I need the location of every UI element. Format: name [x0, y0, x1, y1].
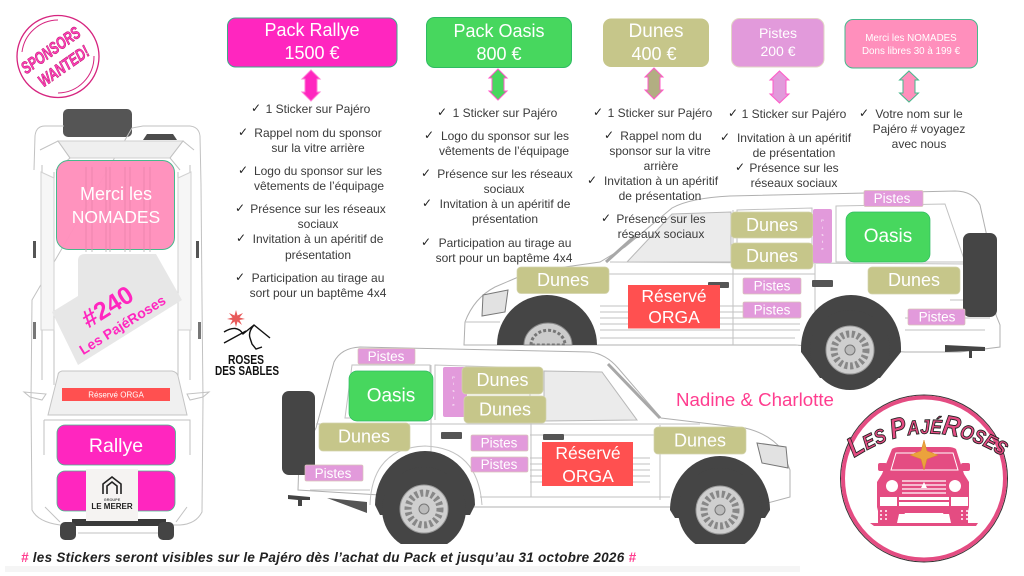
sticker: oasis: Oasis — [864, 226, 912, 247]
benefits list: merci les nomades: Votre nom sur le — [875, 107, 963, 121]
windshield — [48, 371, 187, 415]
sticker: pistes roof: Pistes — [368, 349, 405, 364]
sticker: oasis — [846, 212, 930, 262]
benefits list: rallye: ✓ — [235, 270, 245, 284]
door handles — [708, 282, 729, 288]
benefits list: pistes: Présence sur les — [749, 161, 839, 175]
sticker: piste vertical: e — [821, 246, 824, 251]
benefits list: rallye: sur la vitre arrière — [271, 141, 365, 155]
sticker: pistes rear: Pistes — [315, 466, 352, 481]
stamp: sponsors wanted: SPONSORS — [18, 23, 85, 78]
logo: roses des sables: ROSES — [228, 352, 264, 367]
sticker: piste vertical: s — [452, 388, 454, 393]
benefits list: oasis: ✓ — [421, 235, 431, 249]
benefits list: rallye: vêtements de l’équipage — [254, 179, 384, 193]
logo car — [870, 447, 978, 526]
sticker: pistes roof: Pistes — [874, 191, 911, 206]
benefits list: rallye: sort pour un baptême 4x4 — [250, 286, 387, 300]
sticker: rallye — [57, 425, 176, 465]
logo: groupe le merer: LE MERER — [91, 502, 133, 511]
pack header: pistes — [732, 18, 824, 67]
benefits list: oasis: sort pour un baptême 4x4 — [436, 251, 573, 265]
pack header: oasis: 800 € — [476, 44, 522, 64]
sticker: réservé orga: ORGA — [562, 466, 614, 486]
benefits list: merci les nomades — [859, 106, 965, 151]
sticker: dunes window 1 — [462, 367, 543, 394]
benefits list: dunes: ✓ — [587, 173, 597, 187]
door handles — [441, 432, 462, 439]
rear wheel — [375, 451, 475, 551]
benefits list: rallye: ✓ — [238, 125, 248, 139]
body lines — [310, 365, 700, 505]
pack header: dunes: Dunes — [629, 21, 683, 42]
benefits list: dunes: réseaux sociaux — [618, 227, 704, 241]
sticker: pistes door 1: Pistes — [481, 436, 518, 450]
benefits list: rallye: ✓ — [235, 201, 245, 215]
sticker: piste vertical: e — [452, 402, 455, 407]
sticker: dunes rear: Dunes — [338, 426, 390, 446]
sticker: réservé orga: Réservé ORGA — [88, 390, 144, 400]
benefits list: oasis — [421, 105, 573, 265]
arrow: oasis — [489, 69, 507, 100]
spare wheel — [282, 391, 315, 475]
crew names: Nadine & Charlotte — [676, 389, 834, 410]
pack header: merci les nomades: Merci les NOMADES — [865, 33, 957, 44]
sticker: dunes front — [517, 267, 609, 294]
pack header: oasis — [426, 18, 572, 68]
tyres — [60, 522, 76, 540]
sticker: rallye: Rallye — [89, 435, 143, 457]
sticker: pistes roof — [864, 190, 923, 206]
sticker: merci les nomades: NOMADES — [72, 207, 160, 227]
benefits list: rallye: ✓ — [236, 231, 246, 245]
pack header: pistes: 200 € — [760, 43, 796, 59]
sticker: pistes door 1: Pistes — [754, 278, 791, 294]
benefits list: rallye: Logo du sponsor sur les — [254, 164, 382, 178]
body lines — [465, 210, 995, 345]
benefits list: dunes: ✓ — [593, 105, 603, 119]
sticker: oasis — [349, 371, 433, 421]
sticker: piste vertical: i — [822, 225, 823, 230]
sticker: piste vertical: P — [821, 218, 824, 223]
benefits list: dunes: ✓ — [601, 211, 611, 225]
benefits list: pistes: 1 Sticker sur Pajéro — [742, 107, 847, 121]
benefits list: merci les nomades: ✓ — [859, 106, 869, 120]
benefits list: rallye — [235, 101, 387, 300]
spare wheel — [963, 233, 997, 317]
sticker: piste vertical: P — [452, 375, 455, 380]
benefits list: merci les nomades: Pajéro # voyagez — [873, 122, 965, 136]
benefits list: rallye: ✓ — [238, 163, 248, 177]
footer note: # les Stickers seront visibles sur le Pajéro dès l’achat du Pack et jusqu’au 31 octobre 2026 # — [21, 550, 636, 565]
headlight — [757, 443, 788, 468]
sticker: dunes window 2 — [464, 396, 546, 423]
sticker: pistes rear — [305, 465, 363, 481]
tow hitch — [288, 495, 310, 506]
sticker: pistes door 2 — [471, 457, 528, 472]
benefits list: oasis: Participation au tirage au — [439, 236, 571, 250]
side vehicle, lower — [282, 347, 790, 552]
sticker: dunes window 1: Dunes — [746, 215, 798, 235]
sticker: pistes door 1 — [743, 278, 801, 294]
sticker: réservé orga — [62, 388, 170, 401]
sticker: piste vertical: t — [822, 239, 824, 244]
logo: roses des sables — [215, 310, 279, 378]
spare wheel on roof — [63, 109, 132, 137]
sticker: réservé orga — [542, 442, 633, 486]
side vehicle, upper right — [464, 191, 1000, 390]
benefits list: oasis: ✓ — [421, 166, 431, 180]
sticker: pistes door 2: Pistes — [481, 457, 518, 472]
headlight — [482, 290, 508, 316]
windows — [627, 212, 731, 262]
body outline — [298, 347, 790, 507]
stickers on upper vehicle — [517, 190, 965, 328]
roof box — [143, 134, 177, 140]
logo: roses des sables: DES SABLES — [215, 363, 279, 378]
logo: les pajéroses: LES PAJÉROSES — [846, 415, 1008, 458]
pack header: oasis: Pack Oasis — [453, 21, 545, 41]
pack header: merci les nomades: Dons libres 30 à 199 € — [862, 46, 961, 57]
sticker: dunes window 2: Dunes — [479, 400, 531, 420]
sticker: pistes door 1 — [471, 435, 528, 451]
sticker: réservé orga: Réservé — [641, 286, 707, 306]
sticker: dunes window 1 — [731, 212, 813, 238]
arrow: rallye — [302, 70, 320, 101]
sticker: réservé orga — [628, 285, 720, 328]
benefits list: oasis: Logo du sponsor sur les — [441, 129, 569, 143]
benefits list: oasis: vêtements de l’équipage — [439, 144, 569, 158]
sticker: race number — [52, 254, 182, 365]
sticker: rallye bumper — [57, 471, 175, 511]
sticker: dunes front: Dunes — [537, 270, 589, 290]
pack header: pistes: Pistes — [759, 25, 797, 41]
pack header: rallye: Pack Rallye — [264, 20, 360, 40]
logo title — [854, 433, 1002, 458]
benefits list: rallye: Participation au tirage au — [252, 271, 384, 285]
benefits list: rallye: présentation — [285, 248, 351, 262]
sticker: dunes window 2: Dunes — [746, 246, 798, 266]
logo: groupe le merer: GROUPE — [104, 498, 121, 502]
benefits list: dunes: sponsor sur la vitre — [609, 144, 711, 158]
white cutout below upper vehicle — [450, 346, 812, 392]
benefits list: dunes: de présentation — [619, 189, 701, 203]
benefits list: oasis: Présence sur les réseaux — [437, 167, 573, 181]
sticker: pistes door 2: Pistes — [754, 302, 791, 318]
windows — [544, 371, 637, 421]
sticker: dunes front — [654, 427, 746, 454]
sticker: dunes rear — [319, 423, 410, 451]
body outline — [464, 191, 1000, 352]
sticker: race number: #240 — [77, 281, 139, 334]
benefits list: oasis: sociaux — [484, 182, 524, 196]
sticker: dunes rear — [868, 267, 960, 294]
benefits list: pistes: de présentation — [753, 146, 835, 160]
benefits list: dunes: Présence sur les — [616, 212, 706, 226]
arrow: dunes — [645, 68, 663, 99]
sticker: pistes rear: Pistes — [919, 310, 956, 324]
sticker: race number: Les PajéRoses — [76, 292, 169, 358]
benefits list: pistes: ✓ — [720, 130, 730, 144]
benefits list: pistes: réseaux sociaux — [751, 176, 837, 190]
arrow: merci les nomades — [900, 71, 918, 102]
benefits list: dunes — [587, 105, 719, 241]
sticker: piste vertical: t — [453, 395, 455, 400]
benefits list: oasis: 1 Sticker sur Pajéro — [453, 106, 558, 120]
front wheel — [497, 295, 597, 345]
stickers on lower vehicle — [305, 348, 746, 486]
sticker: pistes roof — [358, 348, 415, 364]
vehicle top-view with stickers — [24, 109, 209, 540]
stamp: sponsors wanted: WANTED! — [35, 42, 93, 91]
sticker: pistes rear — [908, 309, 965, 325]
sticker: piste vertical — [813, 209, 832, 263]
benefits list: oasis: ✓ — [422, 196, 432, 210]
benefits list: rallye: 1 Sticker sur Pajéro — [266, 102, 371, 116]
logo star — [910, 440, 938, 470]
logo: groupe le merer — [86, 469, 138, 521]
benefits list: rallye: Invitation à un apéritif de — [253, 232, 384, 246]
benefits list: pistes: Invitation à un apéritif — [737, 131, 852, 145]
sticker: dunes window 1: Dunes — [476, 370, 529, 390]
benefits list: oasis: présentation — [472, 212, 538, 226]
sticker: réservé orga: ORGA — [648, 307, 700, 327]
benefits list: dunes: Invitation à un apéritif — [604, 174, 719, 188]
benefits list: oasis: ✓ — [424, 128, 434, 142]
pack header: rallye: 1500 € — [284, 43, 340, 63]
sticker: oasis: Oasis — [367, 386, 415, 406]
benefits list: dunes: arrière — [644, 159, 679, 173]
benefits list: rallye: sociaux — [298, 217, 338, 231]
benefits list: rallye: Rappel nom du sponsor — [254, 126, 382, 140]
sticker: merci les nomades: Merci les — [80, 184, 152, 204]
sticker: dunes window 2 — [731, 243, 813, 269]
sticker: piste vertical: i — [453, 381, 454, 386]
pack header: dunes — [603, 18, 709, 67]
stamp: sponsors wanted — [17, 16, 99, 98]
pack header: merci les nomades — [845, 20, 978, 68]
sticker: merci les nomades — [56, 160, 174, 250]
front wheel — [670, 456, 770, 552]
benefits list: dunes: 1 Sticker sur Pajéro — [608, 106, 713, 120]
sticker: piste vertical — [443, 367, 467, 417]
vehicle outline — [24, 126, 209, 540]
benefits list: dunes: Rappel nom du — [620, 129, 702, 143]
benefits list: oasis: ✓ — [437, 105, 447, 119]
tow hitch — [945, 345, 985, 358]
benefits list: pistes: ✓ — [728, 106, 738, 120]
benefits list: pistes: ✓ — [735, 160, 745, 174]
sticker: dunes rear: Dunes — [888, 270, 940, 290]
benefits list: rallye: Présence sur les réseaux — [250, 202, 386, 216]
sticker: réservé orga: Réservé — [555, 443, 621, 463]
benefits list: merci les nomades: avec nous — [892, 137, 946, 151]
sticker: pistes door 2 — [743, 302, 801, 318]
footer note — [5, 550, 800, 572]
benefits list: oasis: Invitation à un apéritif de — [440, 197, 571, 211]
pack header: rallye — [228, 18, 397, 67]
benefits list: dunes: ✓ — [604, 128, 614, 142]
sticker: piste vertical: s — [822, 232, 824, 237]
logo: les pajéroses — [840, 394, 1008, 562]
pack header: dunes: 400 € — [631, 44, 677, 64]
arrow: pistes — [770, 71, 789, 103]
benefits list: rallye: ✓ — [251, 101, 261, 115]
benefits list: pistes — [720, 106, 852, 190]
sticker: dunes front: Dunes — [674, 430, 726, 450]
rear wheel — [801, 295, 901, 390]
